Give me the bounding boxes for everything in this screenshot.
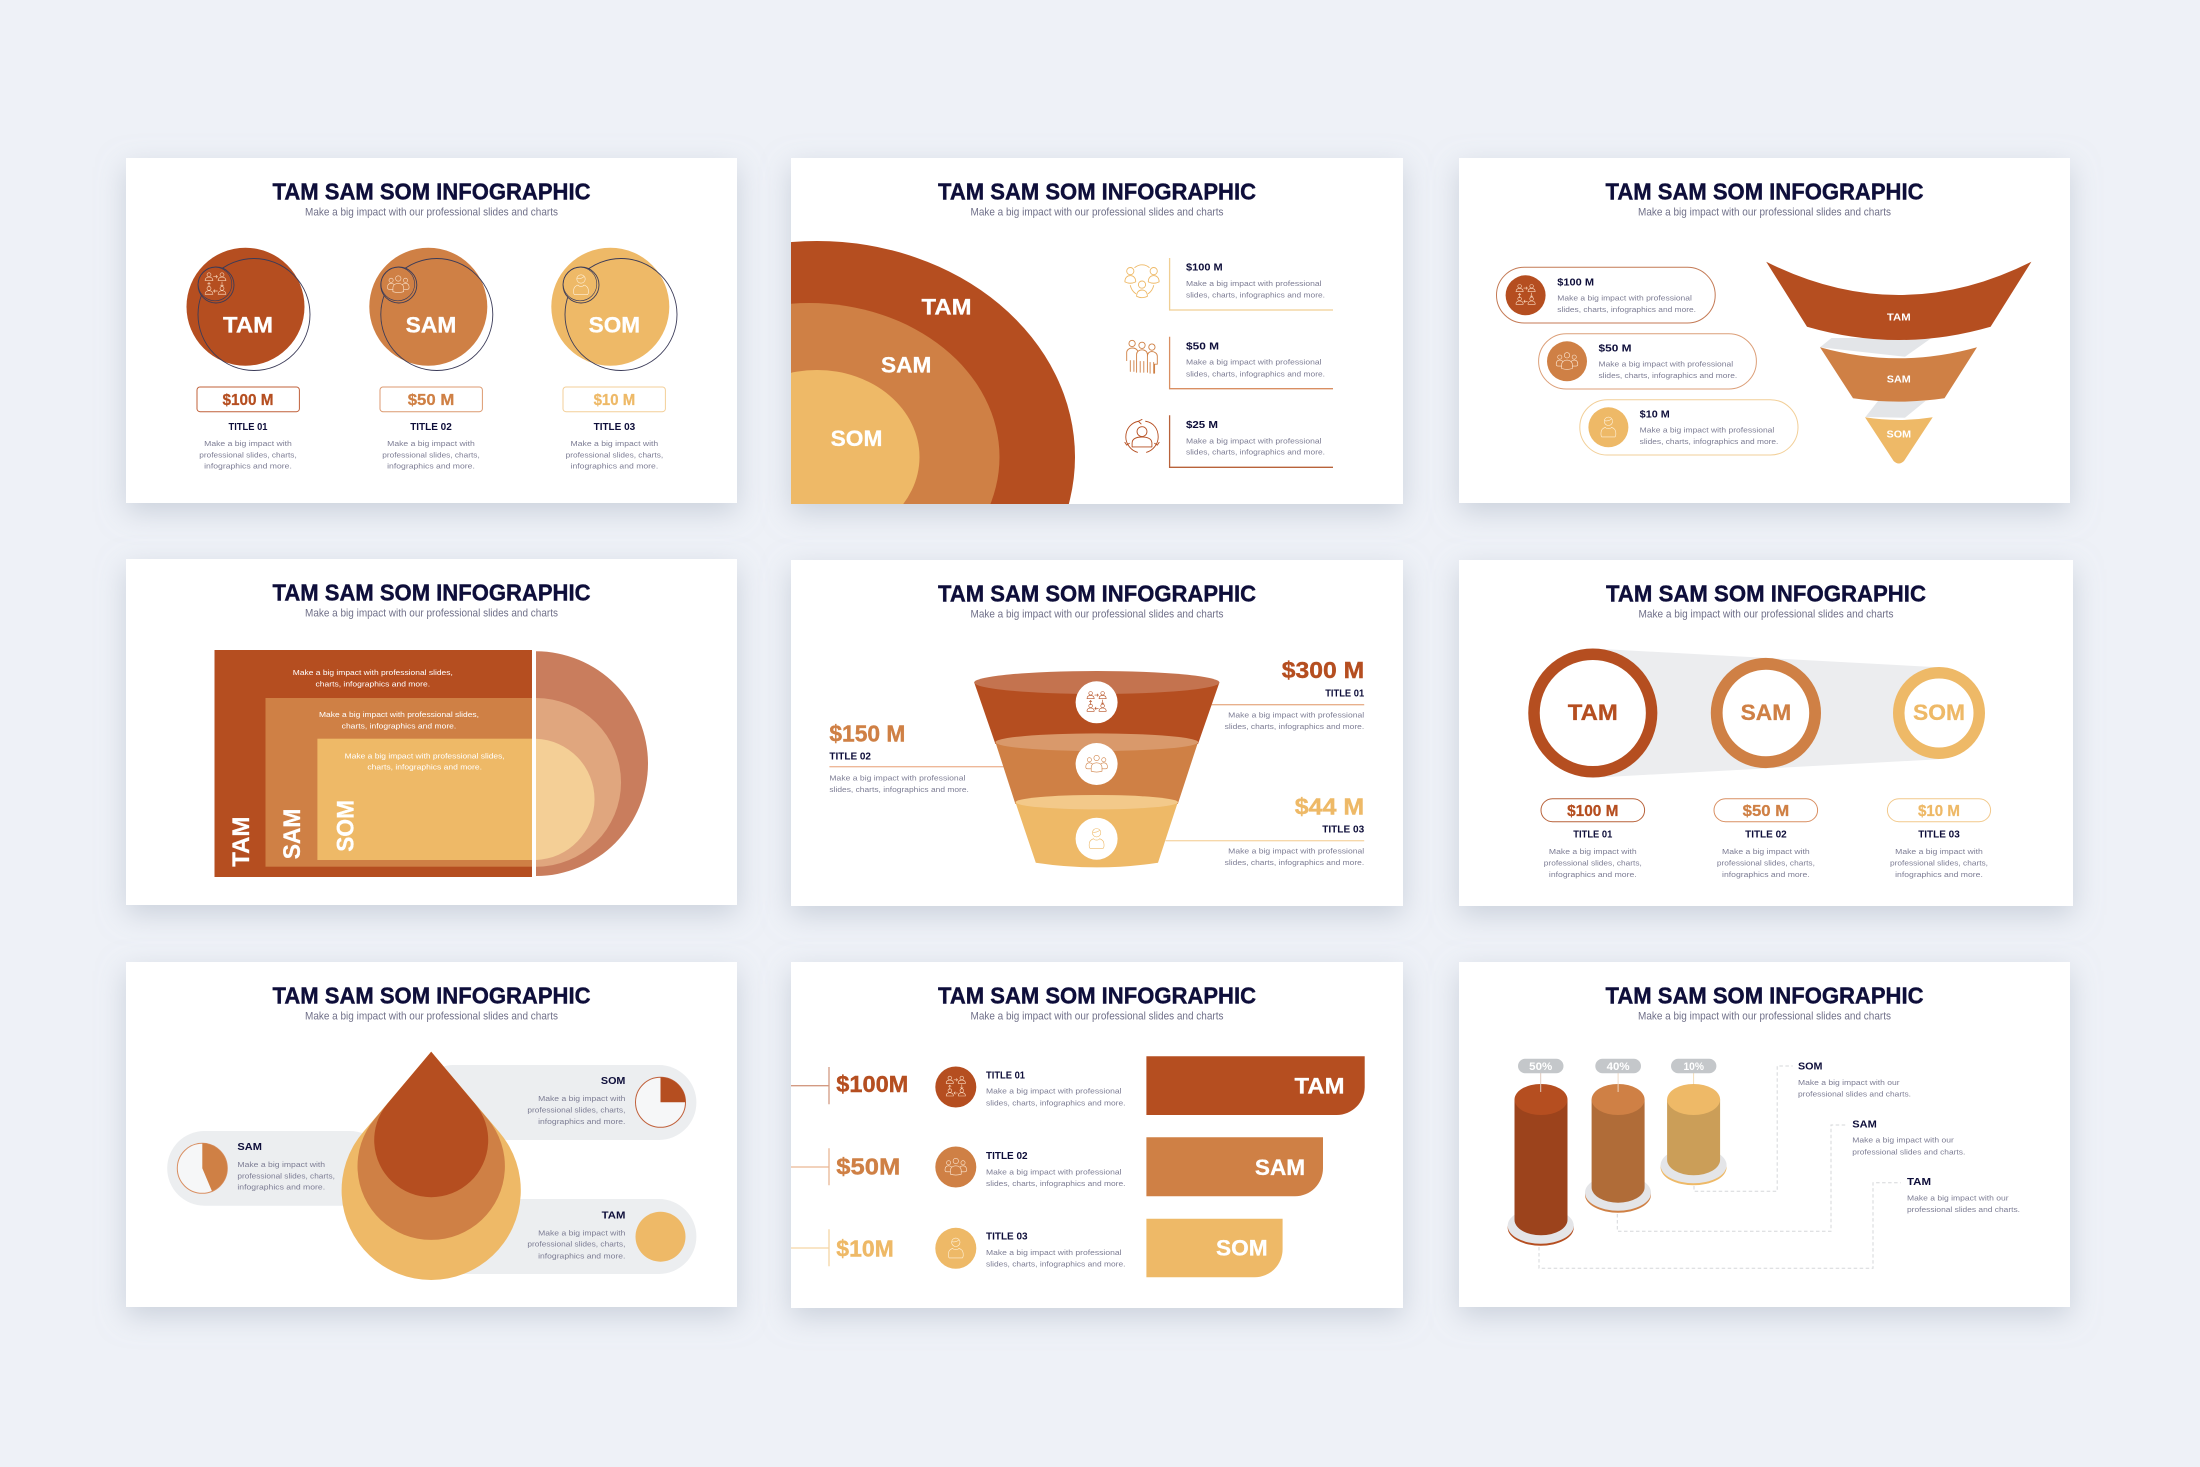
legend: SAM: SAM <box>1852 1118 1877 1130</box>
legend: TAM: TAM <box>1907 1176 1931 1188</box>
heading: TAM SAM SOM INFOGRAPHIC <box>272 982 590 1008</box>
item: TAM: infographics and more. <box>538 1251 625 1260</box>
SOM ring column <box>1887 673 1991 879</box>
callout: $44 M: TITLE 03 <box>1322 823 1364 835</box>
SAM ring column: infographics and more. <box>1722 870 1810 879</box>
item: $25 M <box>1125 415 1333 467</box>
row: $50M SAM <box>791 1137 1323 1196</box>
pill: $100 M <box>1496 267 1715 323</box>
item: SOM: Make a big impact with <box>538 1094 625 1103</box>
item: TAM: Make a big impact with <box>538 1228 625 1237</box>
callout: $300 M: Make a big impact with professional <box>1228 710 1365 719</box>
heading: TAM SAM SOM INFOGRAPHIC <box>1606 580 1926 606</box>
grey pills <box>167 1065 696 1274</box>
panel: nested rectangles slide <box>126 559 737 905</box>
TAM circle column <box>186 248 310 471</box>
item: TAM <box>527 1209 686 1262</box>
nested rectangles: SOM <box>333 800 360 852</box>
TAM ring column <box>1534 654 1652 879</box>
row: $100M TAM: TITLE 01 <box>986 1069 1025 1081</box>
funnel chart: SAM <box>1887 374 1911 386</box>
row: $100M TAM <box>791 1056 1365 1115</box>
item: TAM: TAM <box>602 1209 626 1221</box>
item: $50 M: $50 M <box>1186 340 1219 352</box>
cylinder: 10%: 10% <box>1683 1061 1704 1073</box>
callout: $44 M: slides, charts, infographics and more. <box>1225 858 1364 867</box>
item: $50 M <box>1127 337 1333 389</box>
SOM circle column: TITLE 03 <box>594 421 635 433</box>
SAM ring column <box>1714 664 1818 879</box>
legend: TAM: Make a big impact with our <box>1907 1193 2009 1202</box>
SOM circle column: $10 M <box>594 392 635 409</box>
SOM ring column: SOM <box>1913 700 1965 725</box>
SOM circle column: infographics and more. <box>571 462 658 471</box>
pill: $100 M: Make a big impact with professional <box>1557 293 1692 302</box>
panel: cone funnel slide <box>791 560 1403 906</box>
SOM circle column <box>551 248 677 471</box>
SOM circle column: professional slides, charts, <box>566 450 663 459</box>
heading: TAM SAM SOM INFOGRAPHIC <box>1606 982 1924 1008</box>
nested rectangles: charts, infographics and more. <box>367 763 482 772</box>
SOM circle column: SOM <box>589 312 640 337</box>
grey perspective band <box>1593 648 1939 778</box>
SAM ring column: professional slides, charts, <box>1717 858 1815 867</box>
row: $10M SOM: SOM <box>1216 1236 1268 1261</box>
panel: cylinders slide <box>1459 962 2070 1307</box>
heading: TAM SAM SOM INFOGRAPHIC <box>1606 178 1924 204</box>
legend: SOM: professional slides and charts. <box>1798 1090 1911 1099</box>
SAM ring column: SAM <box>1741 700 1791 725</box>
subheading: Make a big impact with our professional slides and charts <box>970 608 1224 620</box>
funnel chart: SOM <box>1887 429 1911 441</box>
TAM ring column: TITLE 01 <box>1573 829 1612 841</box>
concentric arcs chart: SOM <box>831 426 882 451</box>
legend: SOM: SOM <box>1798 1061 1823 1073</box>
heading: TAM SAM SOM INFOGRAPHIC <box>938 982 1256 1008</box>
row: $10M SOM <box>791 1219 1283 1277</box>
pill: $10 M: slides, charts, infographics and more. <box>1640 437 1778 446</box>
SAM circle column <box>369 248 493 471</box>
row: $100M TAM: Make a big impact with professional <box>986 1087 1122 1096</box>
item: $100 M <box>1125 258 1333 310</box>
SAM circle column: Make a big impact with <box>387 439 475 448</box>
TAM ring column: professional slides, charts, <box>1544 858 1642 867</box>
panel: teardrop slide <box>126 962 737 1307</box>
item: $100 M: slides, charts, infographics and more. <box>1186 291 1325 300</box>
item: $25 M: Make a big impact with professional <box>1186 436 1322 445</box>
subheading: Make a big impact with our professional slides and charts <box>970 206 1224 218</box>
callout: $150 M: TITLE 02 <box>829 751 871 763</box>
concentric arcs chart: SAM <box>881 353 931 378</box>
panel: concentric arcs slide <box>781 157 1413 523</box>
pill: $100 M: slides, charts, infographics and more. <box>1557 305 1696 314</box>
teardrop chart <box>342 1052 521 1280</box>
SAM circle column: TITLE 02 <box>410 421 452 433</box>
legend: TAM <box>1907 1176 2020 1214</box>
row: $100M TAM: TAM <box>1294 1074 1344 1099</box>
item: SOM <box>527 1075 686 1127</box>
item: $100 M: $100 M <box>1186 262 1223 274</box>
nested rectangles: SAM <box>279 809 306 859</box>
item: $25 M: $25 M <box>1186 419 1218 431</box>
nested rectangles: TAM <box>228 817 255 867</box>
callout: $150 M: Make a big impact with professional <box>829 773 966 782</box>
item: SAM: infographics and more. <box>237 1183 325 1192</box>
row: $50M SAM: TITLE 02 <box>986 1150 1028 1162</box>
item: SOM: professional slides, charts, <box>527 1106 625 1115</box>
TAM circle column: Make a big impact with <box>204 439 292 448</box>
row: $100M TAM: $100M <box>836 1071 908 1097</box>
funnel chart <box>1766 262 2031 464</box>
SAM circle column: SAM <box>406 312 456 337</box>
cone chart <box>974 671 1219 867</box>
pill: $50 M: Make a big impact with professional <box>1598 359 1733 368</box>
SAM circle column: infographics and more. <box>387 462 475 471</box>
legend: SOM <box>1798 1061 1911 1099</box>
SOM ring column: infographics and more. <box>1895 870 1983 879</box>
nested rectangles: charts, infographics and more. <box>316 679 430 688</box>
TAM ring column: $100 M <box>1567 803 1618 820</box>
SAM ring column: Make a big impact with <box>1722 847 1810 856</box>
item: $100 M: Make a big impact with professional <box>1186 279 1322 288</box>
pill: $10 M: Make a big impact with professional <box>1640 425 1775 434</box>
subheading: Make a big impact with our professional slides and charts <box>305 206 558 218</box>
legend: SAM: professional slides and charts. <box>1852 1147 1965 1156</box>
TAM circle column: $100 M <box>222 392 274 409</box>
item: SAM: Make a big impact with <box>237 1160 325 1169</box>
legend: SOM: Make a big impact with our <box>1798 1078 1900 1087</box>
legend: TAM: professional slides and charts. <box>1907 1205 2020 1214</box>
subheading: Make a big impact with our professional slides and charts <box>1638 608 1894 620</box>
funnel chart: TAM <box>1887 312 1911 324</box>
item: $50 M: slides, charts, infographics and more. <box>1186 369 1325 378</box>
SOM ring column: TITLE 03 <box>1918 829 1960 841</box>
SOM ring column: professional slides, charts, <box>1890 858 1988 867</box>
pill: $50 M <box>1539 334 1756 389</box>
item: $50 M: Make a big impact with professional <box>1186 358 1322 367</box>
TAM ring column: TAM <box>1568 700 1618 725</box>
heading: TAM SAM SOM INFOGRAPHIC <box>272 178 590 204</box>
SAM circle column: $50 M <box>408 392 454 409</box>
item: SOM: infographics and more. <box>538 1117 625 1126</box>
SAM ring column: TITLE 02 <box>1745 829 1787 841</box>
legend: SAM <box>1852 1118 1965 1156</box>
heading: TAM SAM SOM INFOGRAPHIC <box>938 178 1256 204</box>
row: $10M SOM: Make a big impact with professional <box>986 1248 1122 1257</box>
TAM circle column: TAM <box>223 312 273 337</box>
callout: $300 M <box>1225 657 1365 731</box>
SAM ring column: $50 M <box>1743 803 1789 820</box>
SOM circle column: Make a big impact with <box>571 439 658 448</box>
cylinder: 40% <box>1585 1059 1651 1213</box>
nested rectangles: Make a big impact with professional slides, <box>319 710 479 719</box>
SOM ring column: $10 M <box>1918 803 1960 820</box>
heading: TAM SAM SOM INFOGRAPHIC <box>938 580 1256 606</box>
callout: $150 M: $150 M <box>829 720 905 746</box>
TAM ring column: infographics and more. <box>1549 870 1637 879</box>
TAM ring column: Make a big impact with <box>1549 847 1637 856</box>
pill: $50 M: slides, charts, infographics and more. <box>1598 371 1737 380</box>
subheading: Make a big impact with our professional slides and charts <box>305 1010 558 1022</box>
cylinder: 50% <box>1508 1059 1574 1246</box>
subheading: Make a big impact with our professional slides and charts <box>1638 206 1891 218</box>
nested rectangles: charts, infographics and more. <box>342 721 456 730</box>
SOM ring column: Make a big impact with <box>1895 847 1983 856</box>
pill: $10 M: $10 M <box>1640 408 1670 420</box>
row: $50M SAM: Make a big impact with professional <box>986 1167 1122 1176</box>
concentric arcs chart <box>791 241 1075 504</box>
row: $10M SOM: $10M <box>836 1236 894 1262</box>
callout: $44 M <box>1225 793 1365 867</box>
heading: TAM SAM SOM INFOGRAPHIC <box>272 579 590 605</box>
TAM circle column: professional slides, charts, <box>199 450 297 459</box>
pill: $10 M <box>1580 400 1798 455</box>
cylinder: 40%: 40% <box>1607 1061 1630 1073</box>
subheading: Make a big impact with our professional slides and charts <box>305 607 558 619</box>
panel: curved funnel slide <box>1459 158 2070 503</box>
pill: $50 M: $50 M <box>1598 342 1632 354</box>
callout: $300 M: slides, charts, infographics and more. <box>1225 722 1364 731</box>
item: TAM: professional slides, charts, <box>527 1240 625 1249</box>
callout: $300 M: TITLE 01 <box>1325 687 1364 699</box>
callout: $150 M: slides, charts, infographics and more. <box>829 785 969 794</box>
pill: $100 M: $100 M <box>1557 276 1594 288</box>
panel: horizontal bars slide <box>791 962 1403 1308</box>
nested rectangles: Make a big impact with professional slides, <box>345 751 505 760</box>
panel: three circles slide <box>126 158 737 503</box>
item: $25 M: slides, charts, infographics and more. <box>1186 448 1325 457</box>
row: $100M TAM: slides, charts, infographics and more. <box>986 1098 1126 1107</box>
subheading: Make a big impact with our professional slides and charts <box>1638 1010 1891 1022</box>
row: $50M SAM: $50M <box>836 1154 900 1180</box>
item: SAM: SAM <box>237 1141 262 1153</box>
subheading: Make a big impact with our professional slides and charts <box>970 1010 1224 1022</box>
dashed connectors <box>1539 1066 1901 1268</box>
row: $50M SAM: SAM <box>1255 1155 1305 1180</box>
item: SAM <box>177 1141 335 1193</box>
cylinder: 50%: 50% <box>1529 1061 1552 1073</box>
concentric arcs chart: TAM <box>922 294 972 319</box>
panel: ring sequence slide <box>1459 560 2073 906</box>
cylinder: 10% <box>1661 1059 1727 1185</box>
half circles <box>536 651 648 876</box>
nested rectangles: Make a big impact with professional slides, <box>293 668 453 677</box>
callout: $300 M: $300 M <box>1282 657 1364 683</box>
item: SOM: SOM <box>601 1075 626 1087</box>
item: SAM: professional slides, charts, <box>237 1171 335 1180</box>
legend: SAM: Make a big impact with our <box>1852 1136 1954 1145</box>
nested rectangles <box>214 650 532 877</box>
callout: $44 M: Make a big impact with professional <box>1228 846 1365 855</box>
row: $10M SOM: slides, charts, infographics and more. <box>986 1260 1126 1269</box>
leader lines <box>829 705 1364 841</box>
row: $10M SOM: TITLE 03 <box>986 1231 1028 1243</box>
TAM circle column: TITLE 01 <box>228 421 268 433</box>
callout: $44 M: $44 M <box>1295 793 1364 819</box>
SAM circle column: professional slides, charts, <box>382 450 480 459</box>
callout: $150 M <box>829 720 969 794</box>
TAM circle column: infographics and more. <box>204 462 292 471</box>
row: $50M SAM: slides, charts, infographics and more. <box>986 1179 1126 1188</box>
